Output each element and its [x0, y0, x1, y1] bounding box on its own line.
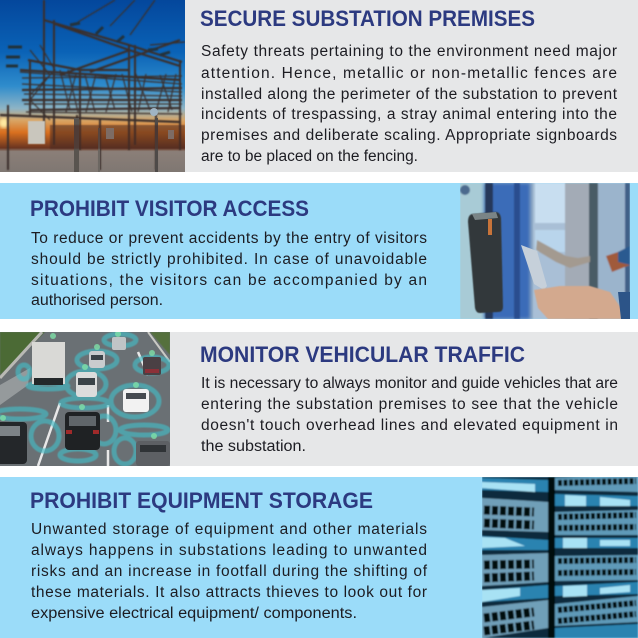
panel: prohibit visitor access — [0, 183, 638, 319]
body text: attention. Hence, metallic or non-metallic fences are — [201, 65, 617, 82]
heading: PROHIBIT VISITOR ACCESS — [30, 196, 309, 221]
body text: Unwanted storage of equipment and other materials — [31, 521, 427, 538]
panel: monitor vehicular traffic — [0, 331, 638, 466]
body text: these materials. It also attracts thieves to look out for — [31, 584, 427, 601]
right rack plates — [555, 476, 638, 626]
body text — [31, 521, 428, 622]
truck — [32, 342, 65, 384]
body text — [31, 230, 427, 309]
body text: the substation. — [201, 438, 306, 455]
heading: SECURE SUBSTATION PREMISES — [200, 6, 535, 31]
panel: prohibit equipment storage — [0, 476, 638, 638]
body text — [201, 43, 618, 165]
cars — [76, 372, 97, 397]
image: server racks — [482, 476, 638, 638]
port holes — [484, 481, 636, 631]
image: connected cars on a road — [0, 331, 170, 466]
body text: situations, the visitors can be accompanied by an — [31, 272, 427, 289]
card reader — [468, 212, 503, 313]
body text: are to be placed on the fencing. — [201, 148, 418, 165]
heading: PROHIBIT EQUIPMENT STORAGE — [30, 488, 373, 513]
body text: entering the substation premises to see that the vehicle — [201, 396, 618, 413]
body text — [201, 375, 618, 455]
body text: It is necessary to always monitor and guide vehicles that are — [201, 375, 618, 392]
image: access card reader — [460, 183, 630, 319]
body text: should be strictly prohibited. In case of unavoidable — [31, 251, 427, 268]
heading: MONITOR VEHICULAR TRAFFIC — [200, 342, 525, 367]
body text: To reduce or prevent accidents by the entry of visitors — [31, 230, 427, 247]
left rack plates — [482, 498, 548, 638]
body text: premises and deliberate scaling. Appropriate signboards — [201, 127, 617, 144]
body text: incidents of trespassing, a stray animal entering into the — [201, 106, 617, 123]
access card — [521, 245, 547, 290]
body text: authorised person. — [31, 292, 163, 309]
hand — [534, 286, 621, 319]
panel: secure substation premises — [0, 0, 638, 172]
body text: doesn't touch overhead lines and elevated equipment in — [201, 417, 618, 434]
image: electrical substation at sunset — [0, 0, 185, 172]
body text: expensive electrical equipment/ components. — [31, 605, 357, 622]
light bars — [482, 478, 638, 638]
body text: always happens in substations leading to unwanted — [31, 542, 427, 559]
body text: installed along the perimeter of the substation to prevent — [201, 86, 618, 103]
body text: risks and an increase in footfall during the shifting of — [31, 563, 428, 580]
body text: Safety threats pertaining to the environment need major — [201, 43, 617, 60]
